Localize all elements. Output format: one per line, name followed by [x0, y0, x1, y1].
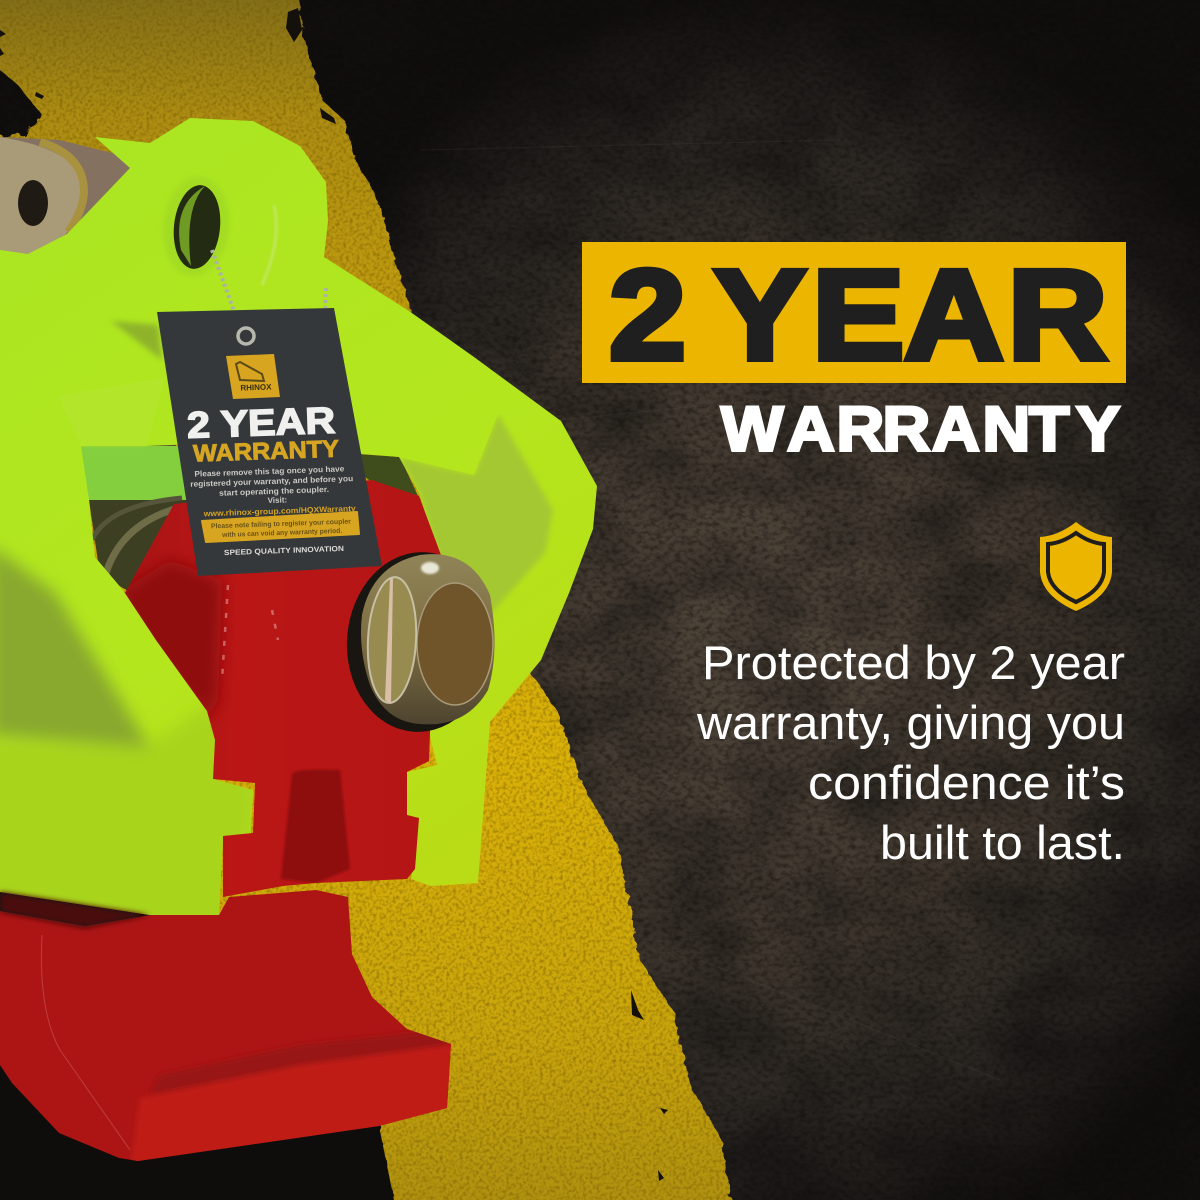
green shading and hole	[0, 173, 553, 930]
tag notice box: with us can void any warranty period.	[221, 528, 342, 539]
body text: confidence it’s	[808, 756, 1125, 809]
tag instructions: Please remove this tag once you have	[194, 464, 345, 479]
heading badge: 2 YEAR: 2 YEAR	[609, 244, 1107, 387]
tag eyelet	[238, 328, 254, 344]
green casting	[0, 118, 597, 915]
tag logo: RHINOX	[240, 382, 272, 393]
warranty chain	[212, 250, 326, 328]
tag instructions: registered your warranty, and before you	[190, 474, 353, 489]
tag logo	[226, 354, 280, 399]
tag instructions: www.rhinox-group.com/HQXWarranty	[203, 504, 356, 518]
body text: warranty, giving you	[696, 696, 1125, 749]
tag instructions	[190, 464, 356, 519]
tag instructions: Visit:	[268, 495, 287, 505]
right arm recess	[399, 414, 553, 615]
tag heading: WARRANTY	[193, 436, 339, 468]
tag notice box: Please note failing to register your coupler	[211, 519, 351, 530]
body text	[696, 636, 1125, 869]
left leg faces	[0, 545, 260, 930]
tag heading	[186, 400, 339, 468]
paint splatter	[0, 8, 668, 1181]
tag instructions: start operating the coupler.	[219, 485, 329, 498]
background pipe fitting	[0, 137, 132, 256]
tag notice box	[202, 512, 359, 542]
steel pin cap	[341, 547, 499, 737]
warranty tag	[157, 308, 382, 576]
excavator coupler	[0, 118, 597, 1170]
shadow under coupler jaw	[0, 1065, 395, 1200]
yellow paint stroke	[0, 0, 735, 1200]
body text: built to last.	[880, 816, 1125, 869]
subheading: WARRANTY: WARRANTY	[721, 394, 1120, 464]
tag footer: SPEED QUALITY INNOVATION	[224, 544, 344, 557]
body text: Protected by 2 year	[702, 636, 1125, 689]
tag heading: 2 YEAR	[186, 400, 336, 446]
icon: shield	[1040, 522, 1112, 611]
opening behind the casting	[81, 385, 418, 592]
red lower jaw	[0, 890, 460, 1170]
red hinge block	[115, 480, 441, 897]
